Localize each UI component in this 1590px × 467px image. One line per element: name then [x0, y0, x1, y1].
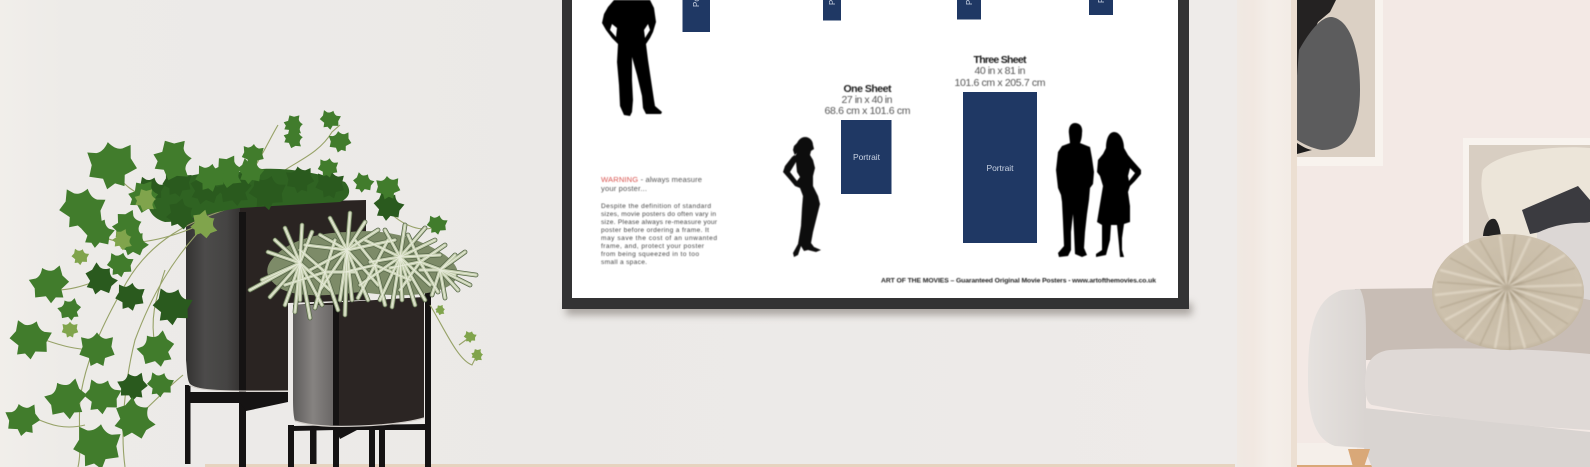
- succulent plant: [250, 213, 476, 318]
- ivy foliage mass above the pot: [148, 169, 349, 222]
- seat cushion: [1365, 348, 1590, 430]
- silhouette: standing man top left: [602, 0, 662, 116]
- three sheet label: [954, 54, 1046, 89]
- warning paragraph: frame, and, protect your poster: [601, 243, 705, 250]
- three sheet poster: Portrait: [986, 163, 1014, 173]
- succulent: dark under-needles: [250, 213, 476, 318]
- back room floor: [1297, 465, 1590, 467]
- three sheet label: 40 in x 81 in: [974, 65, 1026, 77]
- three sheet label: Three Sheet: [974, 54, 1027, 66]
- one sheet label: 68.6 cm x 101.6 cm: [824, 105, 911, 117]
- dark smear: [1522, 186, 1590, 234]
- warning text block: [601, 175, 702, 193]
- skirting board: [1297, 443, 1357, 465]
- sofa: [1308, 223, 1590, 467]
- planter: small pot and stand: [288, 287, 431, 467]
- wall art: right: [1463, 138, 1590, 245]
- one sheet label: One Sheet: [844, 83, 892, 95]
- grey blob: [1297, 17, 1360, 150]
- top row posters: [682, 0, 1113, 32]
- footer credit: ART OF THE MOVIES – Guaranteed Original Movie Posters - www.artofthemovies.co.uk: [881, 278, 1156, 284]
- pot: small: [293, 297, 424, 427]
- ivy leaves: dark: [79, 164, 408, 404]
- warning paragraph: small a space.: [601, 259, 647, 266]
- black spot: [1483, 219, 1501, 236]
- poster frame: [562, 0, 1189, 309]
- warning paragraph: may save the cost of an unwanted: [601, 235, 717, 242]
- poster: cropped two: [823, 0, 841, 20]
- pot: tall: [240, 200, 366, 391]
- warning paragraph: [601, 203, 718, 266]
- succulent: pale needles: [250, 213, 476, 318]
- back panel: [1355, 288, 1590, 360]
- ivy leaves: mid green: [3, 107, 449, 467]
- ivy leaves: light: [62, 188, 484, 362]
- warning paragraph: poster before ordering a frame. It: [601, 227, 709, 234]
- warning text block: your poster...: [601, 184, 647, 193]
- framed poster: [562, 0, 1192, 315]
- poster: cropped four: [1089, 0, 1113, 15]
- one sheet label: 27 in x 40 in: [842, 94, 893, 106]
- stand: tall: [185, 212, 288, 467]
- silhouette: man: [1056, 123, 1094, 257]
- floor: [205, 464, 1235, 467]
- dark figure top: [1297, 0, 1336, 76]
- warning paragraph: size. Please always re-measure your: [601, 219, 718, 226]
- one sheet poster: Portrait: [853, 152, 881, 162]
- pale blob: [1481, 147, 1590, 240]
- planter: tall pot and stand: [185, 200, 366, 467]
- leg: [1348, 449, 1370, 467]
- stand: small: [288, 287, 431, 467]
- ivy stems: [35, 125, 477, 467]
- ivy plant: [3, 107, 484, 467]
- one sheet poster: [841, 120, 892, 194]
- back legs: [310, 428, 385, 467]
- back room wall: [1297, 0, 1590, 467]
- poster: cropped three: [957, 0, 981, 20]
- warning paragraph: from being squeezed in to too: [601, 251, 699, 258]
- succulent: bright midribs: [250, 213, 476, 318]
- one sheet label: [824, 83, 911, 117]
- warning text block: WARNING - always measure: [601, 175, 702, 184]
- silhouette: woman with ponytail: [783, 137, 821, 257]
- silhouette: woman: [1096, 132, 1141, 257]
- warning paragraph: Despite the definition of standard: [601, 203, 711, 210]
- wall art: left: [1297, 0, 1383, 166]
- arm: [1308, 289, 1366, 448]
- back cushion: [1537, 223, 1590, 360]
- silhouette: man and woman pair: [1056, 123, 1141, 257]
- poster: cropped one: [682, 0, 710, 32]
- three sheet poster: [963, 92, 1037, 243]
- base: [1364, 408, 1590, 467]
- poster paper: [572, 0, 1178, 298]
- three sheet label: 101.6 cm x 205.7 cm: [954, 77, 1046, 89]
- warning paragraph: sizes, movie posters do often vary in: [601, 211, 716, 218]
- succulent: olive core: [267, 231, 458, 295]
- round pillow: [1432, 234, 1584, 350]
- door pillar: [1237, 0, 1297, 467]
